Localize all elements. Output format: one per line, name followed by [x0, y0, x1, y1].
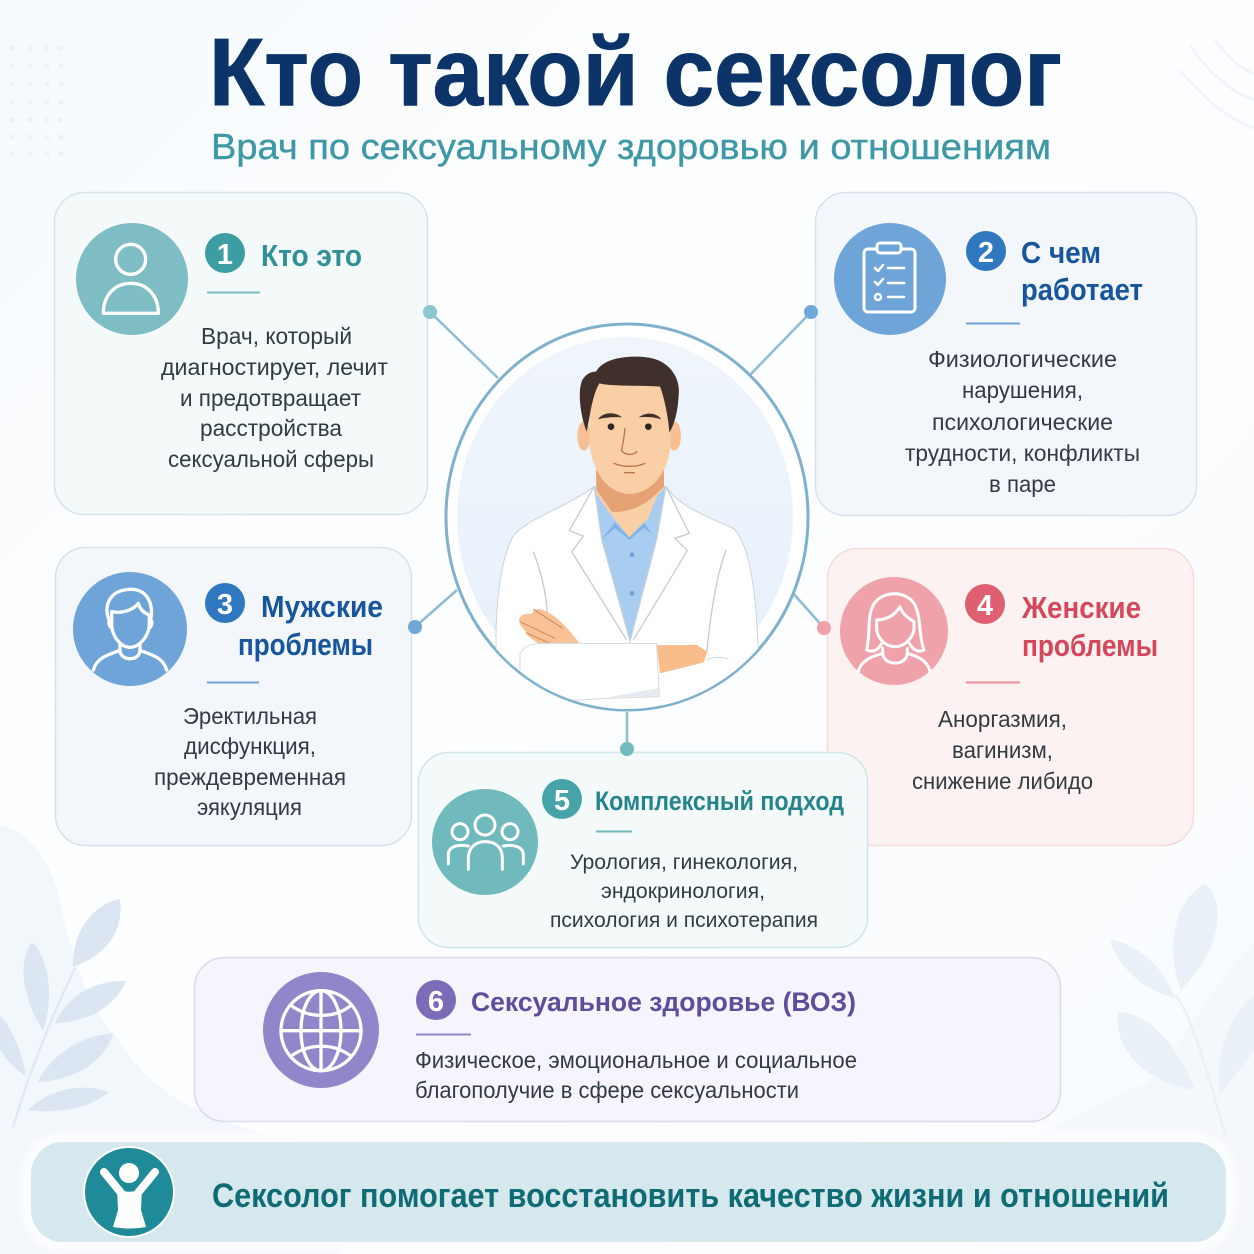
text 6: Физическое, эмоциональное и социальное — [415, 1047, 857, 1073]
heading 2 — [1021, 235, 1143, 307]
coat — [496, 487, 761, 720]
badge 2: 2 — [978, 237, 994, 269]
neck — [596, 470, 664, 537]
text 4 — [912, 706, 1093, 794]
badge 4: 4 — [977, 590, 993, 622]
panel 4: women — [828, 548, 1194, 846]
badge 6: 6 — [428, 986, 444, 1018]
heading 6: Сексуальное здоровье (ВОЗ) — [471, 987, 856, 1017]
text 3: эякуляция — [197, 794, 302, 820]
text 2: психологические — [932, 409, 1113, 435]
text 3 — [154, 703, 346, 820]
text 1: Врач, который — [201, 323, 352, 349]
icon: globe — [263, 972, 379, 1088]
badge 4 — [965, 584, 1005, 624]
badge 1: 1 — [217, 239, 233, 271]
panel 6: WHO — [194, 958, 1060, 1122]
badge 3: 3 — [217, 589, 233, 621]
text 2: трудности, конфликты — [905, 440, 1140, 466]
text 5 — [550, 851, 818, 932]
text 6 — [415, 1047, 857, 1103]
heading 3: Мужские — [261, 589, 383, 624]
connectors — [408, 305, 831, 756]
icon: group — [432, 789, 538, 895]
heading 5: Комплексный подход — [595, 786, 844, 816]
heading 4: проблемы — [1022, 628, 1158, 663]
text 4: снижение либидо — [912, 768, 1093, 794]
arms and hands — [519, 609, 580, 645]
panel 1: who — [54, 192, 428, 514]
text 5: Урология, гинекология, — [570, 851, 798, 874]
text 2: в паре — [989, 471, 1056, 497]
text 5: психология и психотерапия — [550, 909, 818, 932]
text 1 — [161, 323, 388, 472]
icon: man — [73, 572, 187, 686]
ears and head — [577, 421, 591, 451]
text 2 — [905, 346, 1140, 497]
icon: person — [76, 223, 188, 335]
text 4: Аноргазмия, — [938, 706, 1067, 732]
text 2: нарушения, — [962, 377, 1083, 403]
face details — [598, 413, 661, 419]
heading 3 — [238, 589, 383, 662]
bottom banner — [22, 1133, 1235, 1251]
heading 4: Женские — [1021, 590, 1141, 625]
text 4: вагинизм, — [952, 737, 1053, 763]
heading 2: С чем — [1021, 235, 1101, 270]
icon: woman — [840, 577, 948, 685]
icon: raised arms figure — [84, 1147, 174, 1237]
panel 5: complex approach — [418, 752, 868, 948]
doctor portrait — [446, 324, 808, 720]
panel 3: men — [56, 548, 412, 846]
text 6: благополучие в сфере сексуальности — [415, 1077, 799, 1103]
badge 5: 5 — [554, 785, 570, 817]
heading 2: работает — [1021, 272, 1143, 307]
banner text: Сексолог помогает восстановить качество жизни и отношений — [212, 1177, 1169, 1215]
text 1: диагностирует, лечит — [161, 354, 388, 380]
text 1: и предотвращает — [180, 385, 361, 411]
text 1: расстройства — [200, 415, 342, 441]
subtitle: Врач по сексуальному здоровью и отношениям — [211, 126, 1051, 167]
hair — [580, 357, 679, 433]
badge 3 — [205, 583, 245, 623]
heading 1: Кто это — [261, 238, 362, 273]
icon: clipboard — [834, 223, 946, 335]
badge 2 — [966, 231, 1006, 271]
text 1: сексуальной сферы — [168, 446, 374, 472]
badge 1 — [205, 233, 245, 273]
text 3: дисфункция, — [184, 733, 316, 759]
badge 6 — [416, 980, 456, 1020]
badge 5 — [542, 779, 582, 819]
text 3: Эректильная — [183, 703, 317, 729]
title: Кто такой сексолог — [209, 19, 1062, 126]
panel 2: what — [816, 192, 1196, 516]
text 3: преждевременная — [154, 764, 346, 790]
text 5: эндокринология, — [601, 880, 765, 903]
text 2: Физиологические — [928, 346, 1117, 372]
shirt — [593, 487, 666, 642]
heading 3: проблемы — [238, 627, 373, 662]
heading 4 — [1021, 590, 1158, 663]
